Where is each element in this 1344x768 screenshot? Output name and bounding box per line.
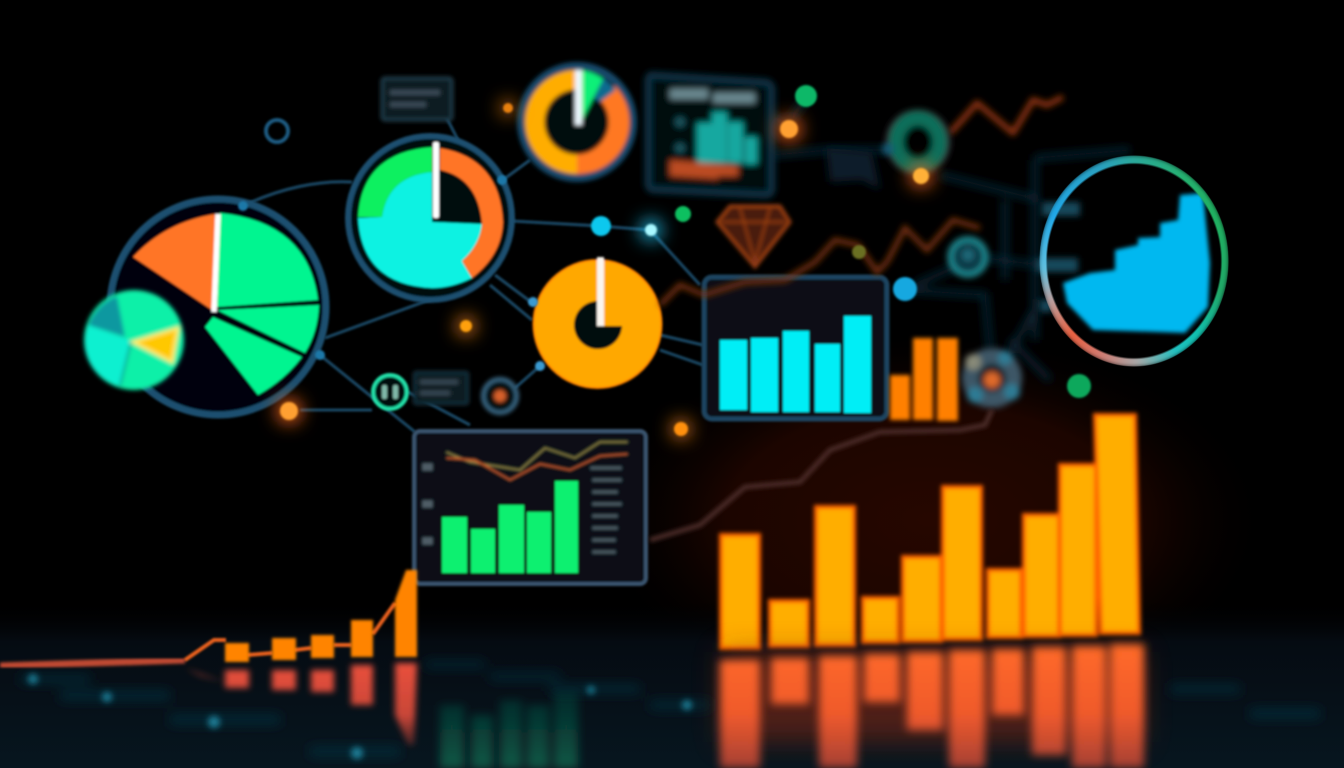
donut yellow-orange half (525, 70, 577, 174)
icon: colour ring right (1039, 155, 1229, 367)
icon: gem (717, 206, 790, 267)
donut cyan sector (358, 172, 482, 288)
side text lines (590, 466, 622, 554)
node dots (238, 85, 1091, 436)
bar reflections (720, 644, 1144, 768)
icon: open ring top left (266, 120, 288, 142)
icon: large pie chart (110, 199, 326, 415)
axis ticks (422, 463, 433, 545)
pie wedge: green lower (205, 317, 302, 395)
green bar reflections (440, 692, 578, 768)
line: top right trend (950, 97, 1063, 133)
chart labels left of ring (1036, 202, 1080, 312)
small chart reflections (185, 663, 417, 745)
icon: pause ring (373, 375, 407, 409)
dim connectors right (770, 100, 1130, 380)
icon: small pie chart (84, 290, 184, 390)
label box: centre (414, 372, 468, 404)
donut orange arc (577, 86, 629, 174)
panel: cyan bar chart (704, 277, 887, 419)
donut hole (574, 301, 622, 349)
icon: target ring (483, 379, 517, 413)
pie wedge: orange (133, 214, 215, 312)
panel: green bar and line chart (414, 431, 646, 584)
icon: small teal hub (950, 239, 986, 275)
small stepped orange chart (0, 570, 417, 666)
pie wedge: green middle (217, 305, 319, 353)
donut orange arc (440, 148, 503, 278)
icon: donut chart teal and orange (348, 136, 512, 300)
donut teal wedge (594, 78, 616, 102)
label box: top left (382, 78, 452, 120)
floor (0, 600, 1344, 768)
pie wedge: green upper (217, 213, 318, 307)
warm glow behind bars (590, 330, 1270, 710)
icon: green ring top right (882, 111, 949, 173)
big orange bar chart (721, 415, 1139, 648)
donut green arc (358, 147, 432, 217)
line: rising trend to big bars (650, 410, 992, 540)
panel header lines (670, 89, 708, 99)
blob: blurred label right (826, 148, 880, 190)
node glows (277, 101, 932, 438)
donut green wedge (580, 70, 603, 122)
line: orange trend across centre (660, 220, 980, 305)
icon: orange donut chart (534, 257, 662, 388)
panel: top small bar chart (648, 75, 772, 195)
icon: top donut chart (521, 66, 633, 178)
small orange bars (890, 338, 958, 421)
haze under bar reflections (722, 652, 1142, 742)
icon: hub circle (962, 348, 1022, 408)
green bars (442, 481, 578, 573)
chart: blue staircase in ring (1063, 193, 1210, 333)
network connectors (243, 105, 703, 432)
glowing network nodes (238, 85, 1091, 438)
lines (446, 442, 628, 480)
